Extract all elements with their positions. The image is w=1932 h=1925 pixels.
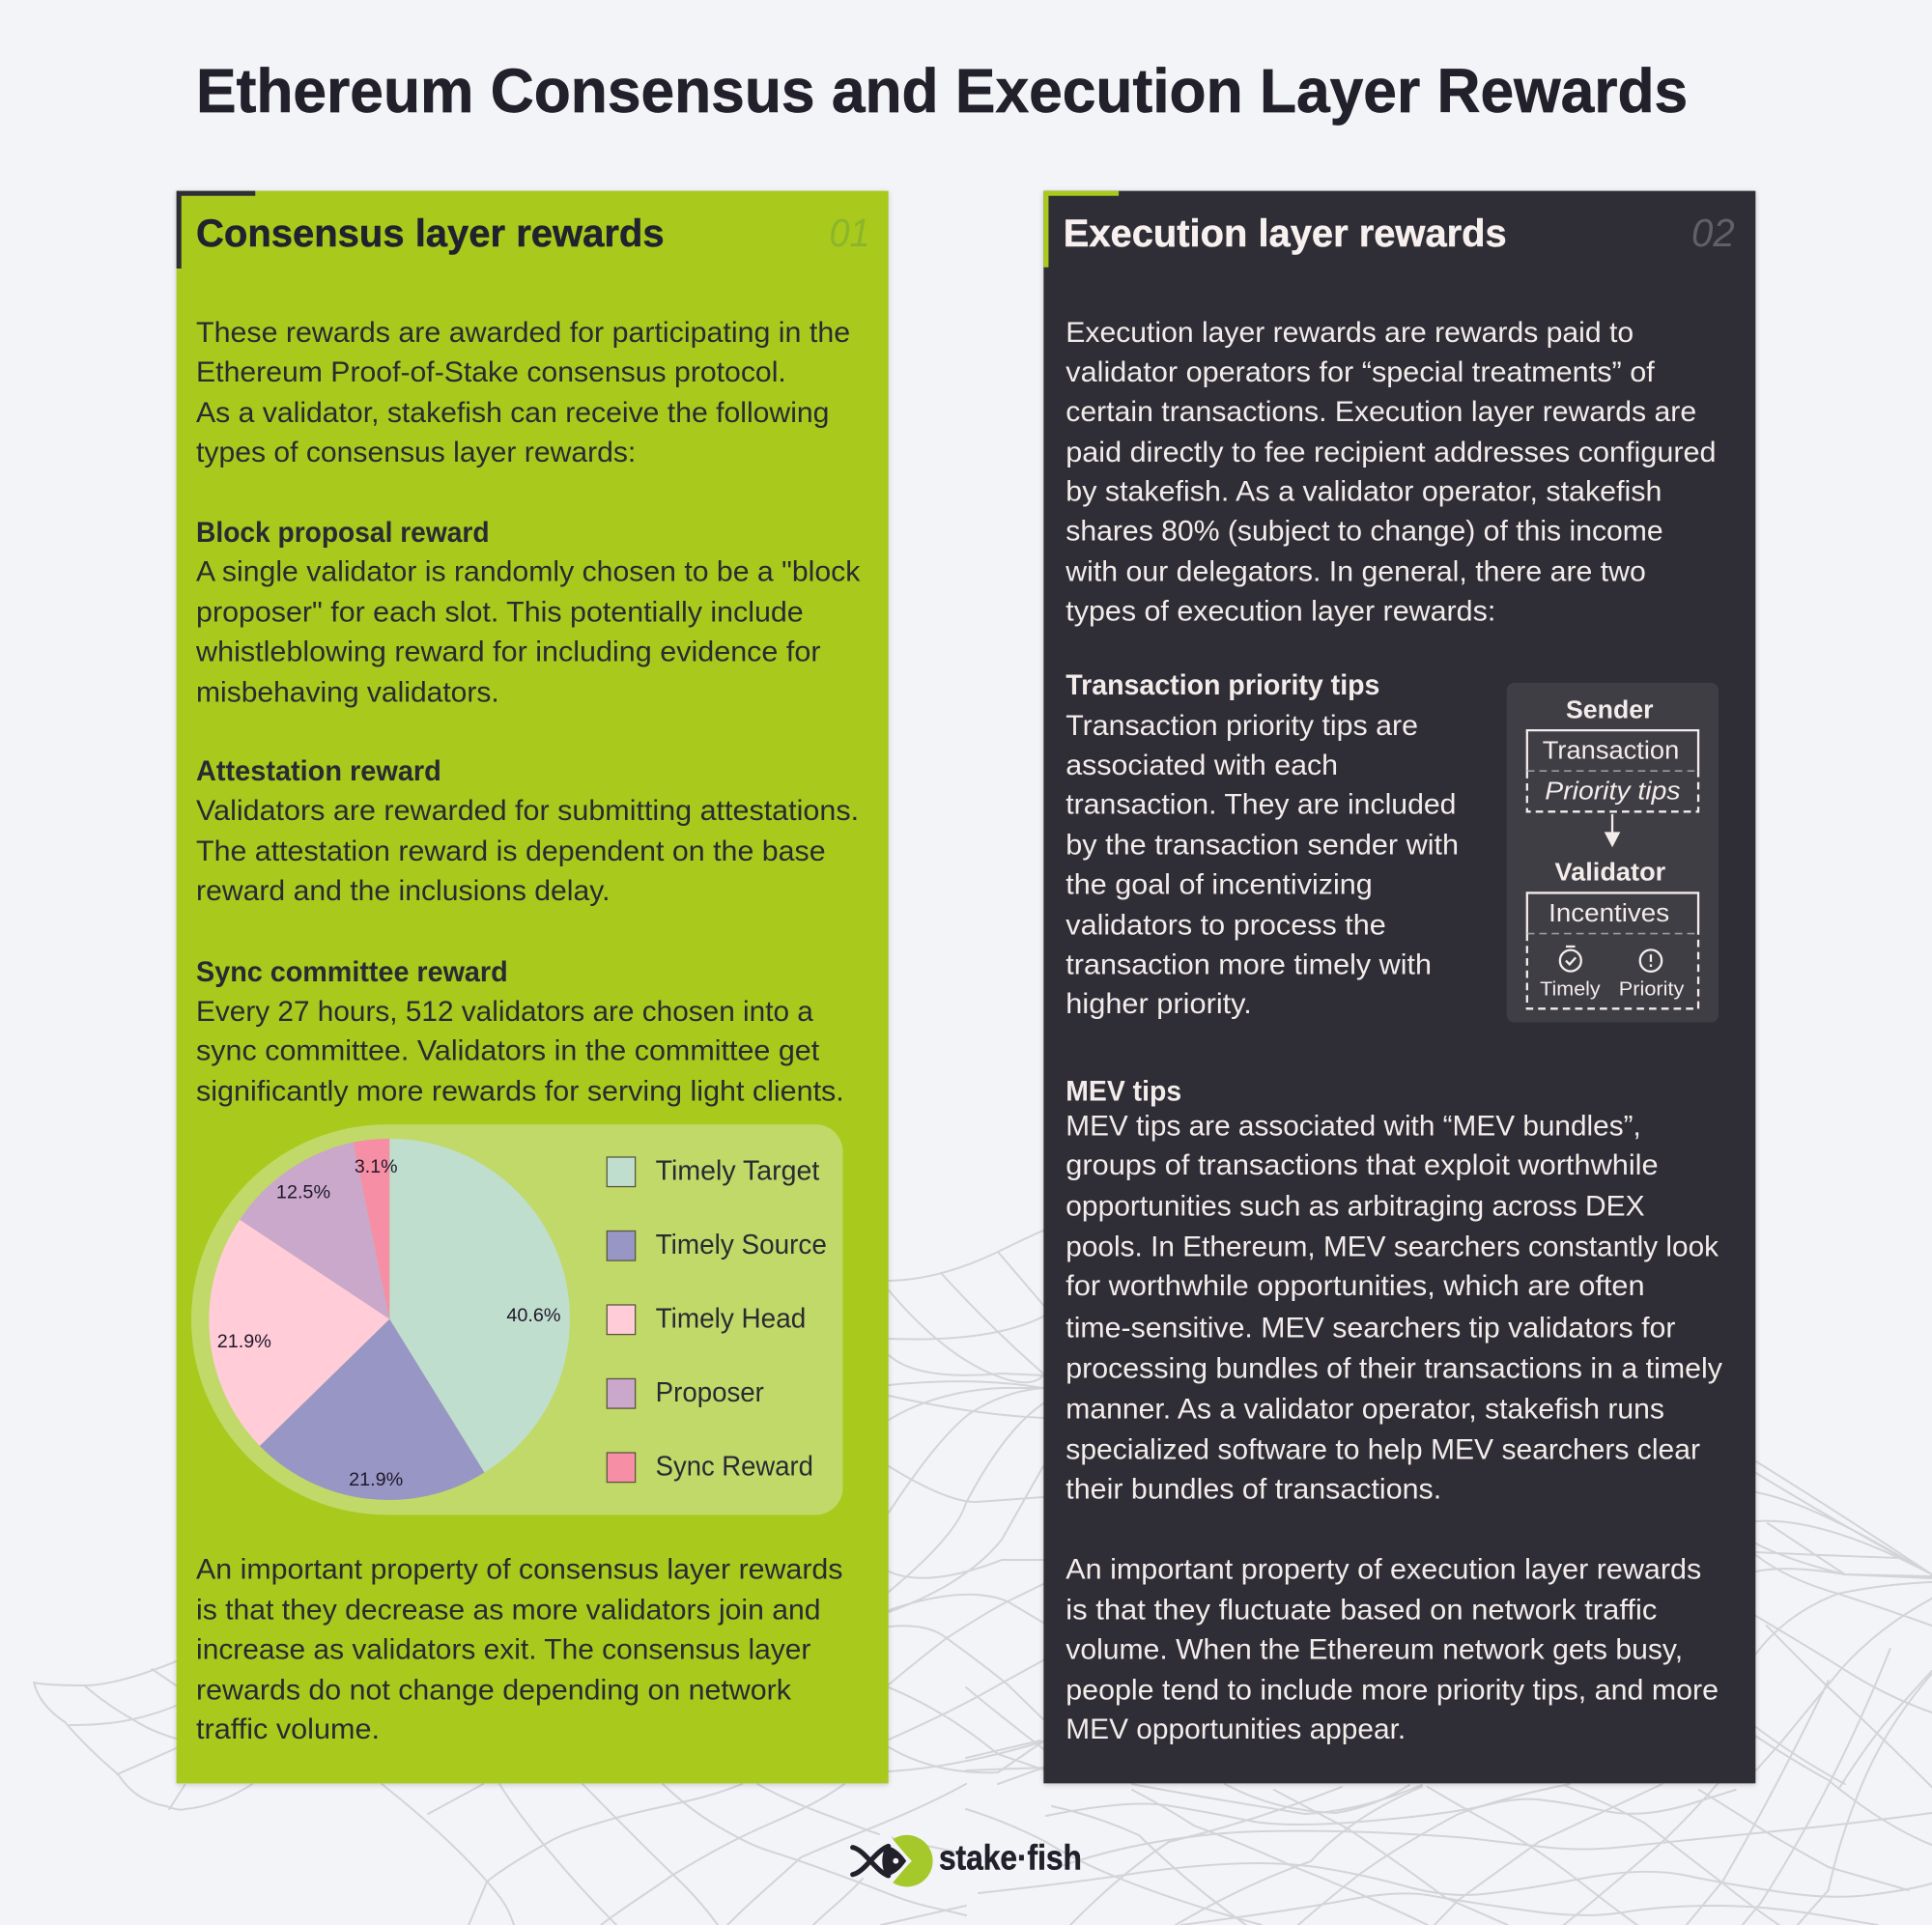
intro text: shares 80% (subject to change) of this income: [1065, 516, 1663, 548]
block proposal reward text: [195, 517, 861, 709]
transaction priority tips text: Transaction priority tips are: [1065, 710, 1418, 742]
attestation reward text: reward and the inclusions delay.: [196, 875, 610, 907]
pie chart: 12.5%: [276, 1182, 330, 1203]
closing text: consensus: is that they decrease as more validators join and: [196, 1595, 821, 1627]
transaction priority tips text: by the transaction sender with: [1065, 830, 1459, 862]
logo: stake.fish: [853, 1834, 1082, 1888]
closing text: execution: people tend to include more priority tips, and more: [1065, 1674, 1719, 1706]
mev tips text: opportunities such as arbitraging across DEX: [1065, 1190, 1645, 1222]
panel number 02: 02: [1691, 211, 1735, 255]
sender box: [1527, 696, 1698, 811]
intro text: types of consensus layer rewards:: [196, 437, 636, 468]
block proposal reward text: A single validator is randomly chosen to be a "block: [196, 556, 861, 588]
validator box: Priority: [1619, 978, 1685, 1000]
validator box: Validator: [1555, 860, 1665, 887]
pie legend: Sync Reward: [656, 1452, 813, 1483]
sync committee reward text: [196, 956, 844, 1108]
transaction priority tips text: the goal of incentivizing: [1065, 868, 1373, 900]
transaction priority tips text: higher priority.: [1065, 988, 1252, 1020]
intro text: [1065, 317, 1717, 627]
pie legend: Timely Target: [656, 1156, 819, 1187]
heading: consensus layer rewards: Consensus layer rewards: [196, 212, 665, 255]
mev tips text: specialized software to help MEV searchers clear: [1065, 1434, 1700, 1466]
mev tips text: groups of transactions that exploit worthwhile: [1065, 1149, 1659, 1181]
icon: stopwatch: [1560, 947, 1581, 972]
sync committee reward text: sync committee. Validators in the committee get: [196, 1035, 819, 1067]
pie legend: [607, 1156, 827, 1483]
attestation reward text: The attestation reward is dependent on the base: [196, 835, 826, 867]
attestation reward text: Validators are rewarded for submitting attestations.: [196, 795, 859, 827]
pie chart: 3.1%: [355, 1156, 398, 1177]
intro text: by stakefish. As a validator operator, stakefish: [1065, 476, 1662, 508]
intro text: certain transactions. Execution layer rewards are: [1065, 396, 1696, 428]
panel: consensus layer rewards: [177, 191, 889, 1783]
intro text: As a validator, stakefish can receive the following: [196, 397, 829, 429]
sync committee reward text: Sync committee reward: [196, 956, 508, 988]
background wave mesh: [34, 1230, 1932, 1925]
corner accent: [179, 193, 255, 269]
attestation reward text: Attestation reward: [196, 755, 441, 787]
intro text: paid directly to fee recipient addresses configured: [1065, 437, 1717, 468]
icon: fish on green circle: [853, 1834, 933, 1888]
mev tips text: [1065, 1076, 1722, 1506]
closing text: execution: An important property of execution layer rewards: [1065, 1553, 1701, 1585]
heading: execution layer rewards: Execution layer rewards: [1064, 212, 1507, 255]
transaction priority tips text: transaction more timely with: [1065, 948, 1432, 980]
mev tips text: their bundles of transactions.: [1065, 1474, 1441, 1506]
arrow: sender to validator: [1605, 814, 1620, 847]
diagram: sender to validator: [1507, 683, 1719, 1022]
attestation reward text: [196, 755, 859, 907]
closing text: consensus: [196, 1553, 842, 1745]
panel background dark: [1043, 191, 1755, 1783]
mev tips text: MEV tips are associated with “MEV bundles”,: [1065, 1110, 1641, 1142]
icon: priority alert: [1640, 949, 1662, 972]
pie chart: 21.9%: [349, 1469, 403, 1490]
transaction priority tips text: [1065, 669, 1459, 1020]
title: Ethereum Consensus and Execution Layer Rewards: [196, 56, 1688, 126]
panel number 01: 01: [829, 211, 870, 255]
intro text: [196, 317, 850, 468]
intro text: These rewards are awarded for participating in the: [196, 317, 850, 349]
validator box: [1527, 860, 1698, 1008]
closing text: execution: volume. When the Ethereum network gets busy,: [1065, 1633, 1683, 1665]
closing text: consensus: rewards do not change depending on network: [196, 1674, 791, 1706]
block proposal reward text: proposer" for each slot. This potentially include: [196, 597, 804, 629]
wordmark: stake·fish: [939, 1839, 1082, 1878]
corner accent: [1046, 193, 1119, 268]
panel: execution layer rewards: [1043, 191, 1755, 1783]
pie chart: [209, 1139, 570, 1500]
closing text: execution: MEV opportunities appear.: [1065, 1713, 1406, 1745]
panel background green: [177, 191, 889, 1783]
transaction priority tips text: Transaction priority tips: [1065, 669, 1379, 701]
pie chart: 21.9%: [217, 1331, 271, 1352]
intro text: types of execution layer rewards:: [1065, 595, 1495, 627]
mev tips text: processing bundles of their transactions in a timely: [1065, 1353, 1722, 1385]
intro text: Execution layer rewards are rewards paid to: [1065, 317, 1634, 349]
intro text: with our delegators. In general, there are two: [1065, 556, 1646, 588]
transaction priority tips text: associated with each: [1065, 750, 1338, 781]
validator box: Timely: [1540, 978, 1602, 1000]
mev tips text: MEV tips: [1065, 1076, 1181, 1108]
mev tips text: time-sensitive. MEV searchers tip validators for: [1065, 1313, 1676, 1345]
mev tips text: for worthwhile opportunities, which are often: [1065, 1270, 1645, 1302]
chart card: [191, 1124, 842, 1515]
sync committee reward text: Every 27 hours, 512 validators are chosen into a: [196, 996, 814, 1028]
closing text: consensus: traffic volume.: [196, 1713, 380, 1745]
mev tips text: manner. As a validator operator, stakefish runs: [1065, 1394, 1664, 1426]
block proposal reward text: whistleblowing reward for including evidence for: [195, 636, 821, 667]
pie legend: Timely Source: [656, 1230, 827, 1260]
closing text: execution: [1065, 1553, 1719, 1745]
sender box: Transaction: [1543, 735, 1679, 764]
intro text: validator operators for “special treatments” of: [1065, 356, 1656, 388]
closing text: consensus: An important property of consensus layer rewards: [196, 1553, 842, 1585]
validator box: Incentives: [1548, 898, 1669, 927]
diagram card: [1507, 683, 1719, 1022]
transaction priority tips text: validators to process the: [1065, 910, 1386, 942]
sync committee reward text: significantly more rewards for serving light clients.: [196, 1076, 844, 1108]
closing text: execution: is that they fluctuate based on network traffic: [1065, 1595, 1657, 1627]
intro text: Ethereum Proof-of-Stake consensus protocol.: [196, 356, 786, 388]
closing text: consensus: increase as validators exit. The consensus layer: [196, 1633, 811, 1665]
mev tips text: pools. In Ethereum, MEV searchers constantly look: [1065, 1231, 1719, 1262]
pie legend: Proposer: [656, 1377, 764, 1408]
block proposal reward text: misbehaving validators.: [196, 677, 499, 709]
block proposal reward text: Block proposal reward: [196, 517, 490, 549]
transaction priority tips text: transaction. They are included: [1065, 789, 1456, 821]
sender box: Priority tips: [1545, 777, 1681, 806]
pie chart: 40.6%: [506, 1305, 560, 1326]
sender box: Sender: [1566, 696, 1654, 723]
pie legend: Timely Head: [656, 1304, 806, 1335]
